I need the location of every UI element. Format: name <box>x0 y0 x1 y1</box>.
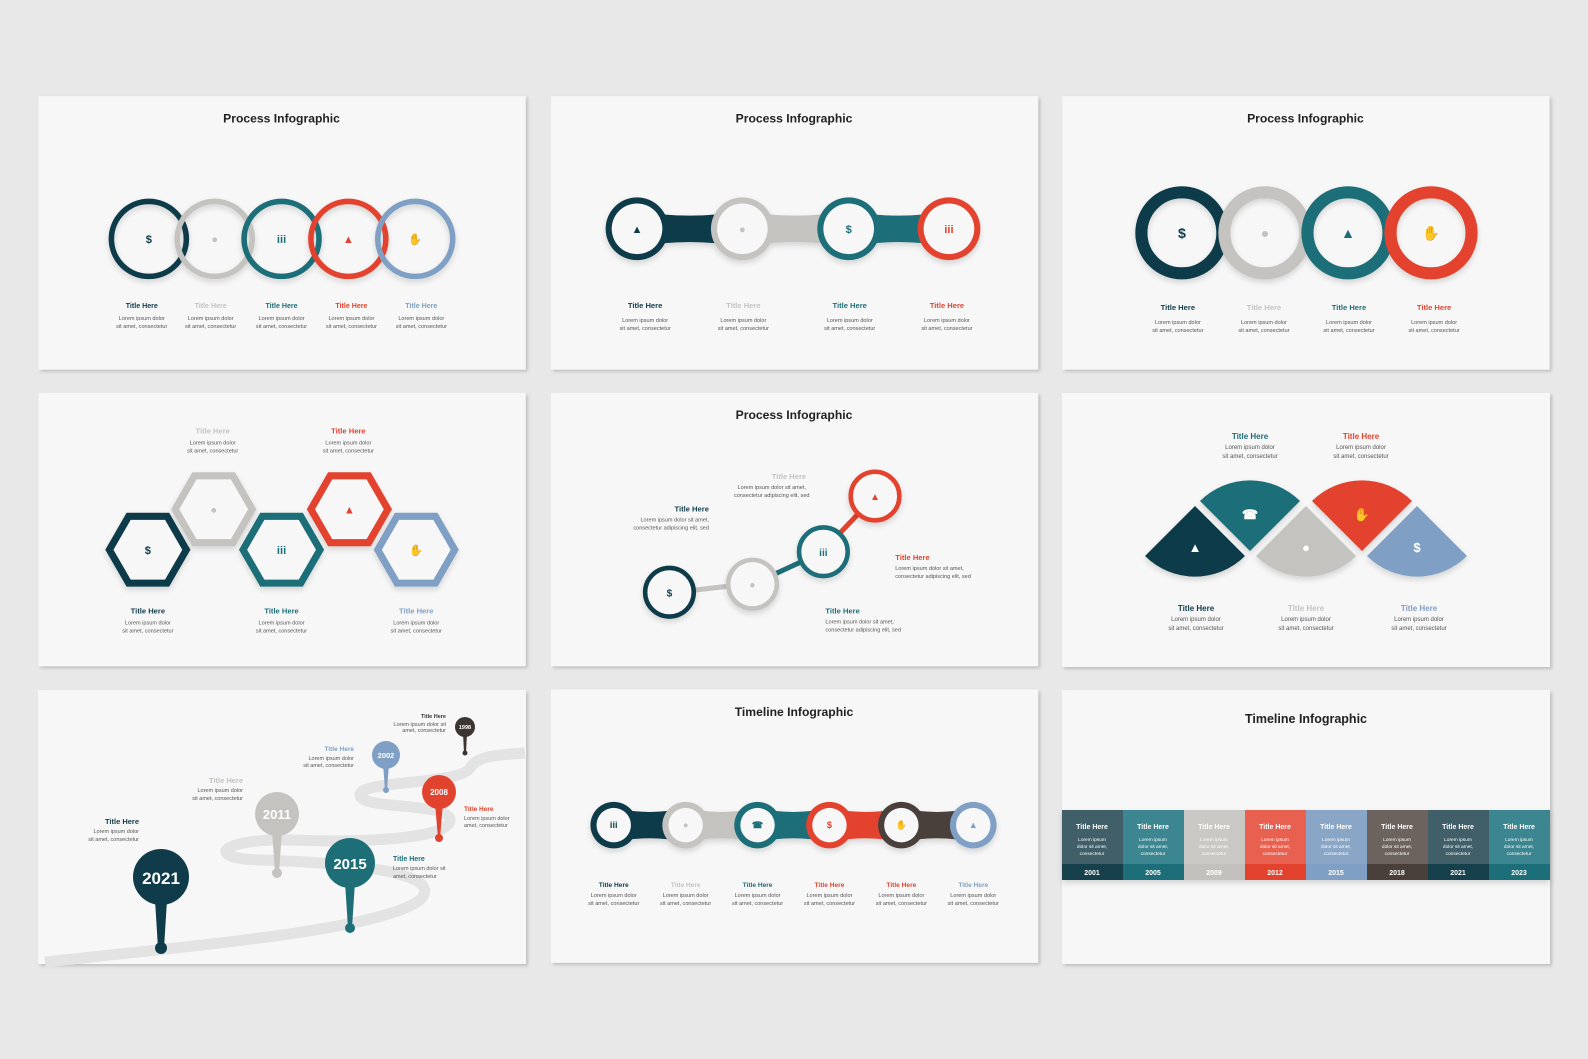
labels: consectetur adipiscing elit, sed <box>633 525 709 531</box>
labels: Title Here <box>726 301 761 310</box>
icons: $ <box>827 820 832 830</box>
labels: sit amet, consectetur <box>588 901 639 907</box>
icons: ▲ <box>344 504 355 516</box>
labels: Lorem ipsum dolor <box>663 893 709 899</box>
labels: Lorem ipsum dolor <box>1155 320 1201 326</box>
icons: iii <box>277 234 286 246</box>
labels: Title Here <box>1161 303 1195 312</box>
labels: Lorem ipsum dolor <box>1171 617 1221 623</box>
labels: Title Here <box>895 553 930 562</box>
icons: ● <box>749 580 756 591</box>
icons: ☎ <box>1242 507 1258 522</box>
labels: Lorem ipsum dolor <box>190 440 236 446</box>
labels: sit amet, consectetur <box>1222 454 1278 460</box>
labels: Lorem ipsum dolor sit <box>393 866 446 872</box>
icons: $ <box>1178 226 1186 242</box>
labels: sit amet, consectetur <box>1278 626 1334 632</box>
labels: sit amet, consectetur <box>396 324 447 330</box>
band text: Lorem ipsum <box>1139 837 1167 843</box>
band text: dolor sit amet, <box>1077 844 1107 850</box>
panel 9: color band timeline <box>1062 690 1550 964</box>
band text: consectetur <box>1507 851 1532 857</box>
labels: Title Here <box>832 301 867 310</box>
chain <box>606 197 980 260</box>
icons: ● <box>739 224 746 236</box>
pins: 1998 <box>459 725 471 731</box>
labels <box>88 714 510 880</box>
icons: ☎ <box>752 820 763 830</box>
labels: sit amet, consectetur <box>303 763 354 769</box>
bands <box>1062 810 1550 880</box>
icons: $ <box>145 545 152 557</box>
labels: Lorem ipsum dolor <box>398 316 444 322</box>
road <box>45 753 525 962</box>
pins: 2008 <box>430 788 448 797</box>
band text: dolor sit amet, <box>1260 844 1290 850</box>
labels: sit amet, consectetur <box>1238 328 1290 334</box>
labels: Title Here <box>1343 432 1380 441</box>
labels: sit amet, consectetur <box>660 901 711 907</box>
labels: Lorem ipsum dolor <box>125 621 171 627</box>
labels: Lorem ipsum dolor <box>197 788 243 794</box>
hexagons <box>109 476 455 583</box>
band text: consectetur <box>1080 851 1105 857</box>
icons: ▲ <box>870 492 880 503</box>
band text: dolor sit amet, <box>1504 844 1534 850</box>
labels: Title Here <box>1288 604 1325 613</box>
band text: consectetur <box>1141 851 1166 857</box>
band text: dolor sit amet, <box>1199 844 1229 850</box>
band text: dolor sit amet, <box>1443 844 1473 850</box>
labels: consectetur adipiscing elit, sed <box>895 574 971 580</box>
title: Process Infographic <box>1247 112 1364 125</box>
title: Process Infographic <box>736 408 853 422</box>
labels: sit amet, consectetur <box>116 324 168 330</box>
icons: ✋ <box>408 232 422 246</box>
panel 7: road timeline pins <box>38 690 526 964</box>
panel 1: linked rings <box>38 96 526 370</box>
labels: Title Here <box>599 882 629 889</box>
labels: amet, consectetur <box>393 874 437 880</box>
sectors <box>1145 480 1467 577</box>
rings <box>111 201 453 276</box>
labels: sit amet, consectetur <box>921 326 973 332</box>
labels: sit amet, consectetur <box>192 796 243 802</box>
labels: Title Here <box>126 302 158 310</box>
icons: ● <box>211 234 218 246</box>
band text: Lorem ipsum <box>1444 837 1472 843</box>
band text: Title Here <box>1503 824 1535 831</box>
icons <box>667 492 880 599</box>
labels: Title Here <box>886 882 917 889</box>
band text: Lorem ipsum <box>1200 837 1228 843</box>
labels: sit amet, consectetur <box>323 449 374 455</box>
labels: Title Here <box>628 301 662 310</box>
labels: Lorem ipsum dolor sit amet, <box>825 620 894 626</box>
icons: ● <box>1261 226 1269 242</box>
labels: sit amet, consectetur <box>804 901 855 907</box>
labels: Lorem ipsum dolor <box>1281 617 1331 623</box>
band text: 2001 <box>1084 870 1100 877</box>
icons: ✋ <box>1422 225 1440 242</box>
icons: ✋ <box>896 819 907 830</box>
labels: Lorem ipsum dolor <box>1394 617 1444 623</box>
band text: Title Here <box>1259 824 1291 831</box>
labels: Lorem ipsum dolor <box>259 316 305 322</box>
labels: Title Here <box>930 301 964 310</box>
labels: Title Here <box>399 607 433 616</box>
labels: sit amet, consectetur <box>732 901 783 907</box>
band text: consectetur <box>1202 851 1227 857</box>
panel 3: thick rings <box>1062 96 1550 370</box>
band text <box>1076 824 1535 877</box>
title: Timeline Infographic <box>735 705 854 719</box>
labels: Title Here <box>1417 303 1451 312</box>
labels: Title Here <box>743 882 773 889</box>
icons: $ <box>846 224 853 236</box>
band text: 2021 <box>1450 870 1466 877</box>
labels: Title Here <box>405 302 437 310</box>
labels: Title Here <box>335 302 368 310</box>
band text: Title Here <box>1137 824 1169 831</box>
icons <box>632 224 954 236</box>
labels: Title Here <box>209 776 243 785</box>
band text: Title Here <box>1198 824 1230 831</box>
icons: ▲ <box>1189 540 1201 555</box>
band text: 2018 <box>1389 870 1405 877</box>
icons: ✋ <box>409 543 423 557</box>
icons: ✋ <box>1354 507 1370 522</box>
labels: Lorem ipsum dolor <box>1225 445 1275 451</box>
labels: Lorem ipsum dolor <box>325 440 372 446</box>
labels: sit amet, consectetur <box>876 901 927 907</box>
labels: consectetur adipiscing elit, sed <box>825 628 901 634</box>
labels: consectetur adipiscing elit, sed <box>734 493 810 499</box>
labels <box>1152 303 1460 334</box>
title: Process Infographic <box>736 112 853 125</box>
labels: sit amet, consectetur <box>256 324 307 330</box>
icons: ▲ <box>1341 226 1355 242</box>
icons: ▲ <box>343 234 354 246</box>
labels: Lorem ipsum dolor <box>827 318 873 324</box>
band text: Lorem ipsum <box>1505 837 1533 843</box>
labels: Lorem ipsum dolor <box>328 316 375 322</box>
band text: Lorem ipsum <box>1383 837 1411 843</box>
labels: Lorem ipsum dolor <box>924 318 970 324</box>
labels: Title Here <box>464 806 494 813</box>
icons: $ <box>146 234 153 246</box>
labels: sit amet, consectetur <box>1391 626 1447 632</box>
labels: Lorem ipsum dolor sit amet, <box>737 485 806 491</box>
labels: sit amet, consectetur <box>326 324 377 330</box>
labels <box>122 426 442 635</box>
band text: Lorem ipsum <box>1322 837 1350 843</box>
labels: sit amet, consectetur <box>185 324 236 330</box>
labels: Lorem ipsum dolor <box>1336 445 1386 451</box>
icons: ● <box>683 820 688 830</box>
pins <box>133 717 475 954</box>
labels: Title Here <box>421 714 446 720</box>
labels: Title Here <box>675 504 709 513</box>
panel 2: connected pill chain <box>551 96 1038 370</box>
labels: Lorem ipsum dolor <box>1411 320 1457 326</box>
panel 6: wave sectors <box>1062 393 1550 667</box>
icons: ● <box>210 504 217 516</box>
icons: iii <box>610 820 618 830</box>
labels: amet, consectetur <box>402 728 446 734</box>
labels: Title Here <box>105 817 139 826</box>
band text: consectetur <box>1263 851 1288 857</box>
labels: Lorem ipsum dolor <box>93 829 139 835</box>
panel 5: ascending steps <box>551 393 1038 666</box>
band text: Title Here <box>1442 824 1474 831</box>
icons: ▲ <box>632 224 643 236</box>
labels: Title Here <box>195 426 230 435</box>
labels: Lorem ipsum dolor <box>878 893 924 899</box>
labels: amet, consectetur <box>464 823 508 829</box>
band text: Title Here <box>1076 824 1108 831</box>
labels: sit amet, consectetur <box>948 901 999 907</box>
icons <box>1189 507 1421 555</box>
band text: Lorem ipsum <box>1261 837 1289 843</box>
labels: Title Here <box>1401 604 1438 613</box>
labels: Title Here <box>1332 303 1366 312</box>
band text: consectetur <box>1324 851 1349 857</box>
title: Process Infographic <box>223 112 340 125</box>
icons <box>146 232 422 246</box>
band text: dolor sit amet, <box>1138 844 1168 850</box>
icons: $ <box>667 588 673 599</box>
band text: Title Here <box>1381 824 1413 831</box>
labels: Title Here <box>671 882 701 889</box>
band text: consectetur <box>1385 851 1410 857</box>
labels: sit amet, consectetur <box>1152 328 1204 334</box>
band text: consectetur <box>1446 851 1471 857</box>
labels: Lorem ipsum dolor <box>950 893 996 899</box>
labels: Lorem ipsum dolor sit amet, <box>640 517 709 523</box>
labels: Title Here <box>331 426 366 435</box>
labels: Lorem ipsum dolor <box>393 621 439 627</box>
labels: Title Here <box>1232 432 1269 441</box>
labels: Lorem ipsum dolor <box>735 893 781 899</box>
labels: Title Here <box>265 302 298 310</box>
labels: Lorem ipsum dolor <box>806 893 853 899</box>
labels <box>633 472 971 634</box>
labels: Title Here <box>264 607 299 616</box>
labels: sit amet, consectetur <box>718 326 769 332</box>
band text: 2023 <box>1511 870 1527 877</box>
labels: Title Here <box>815 882 845 889</box>
labels <box>1168 432 1447 632</box>
labels: Lorem ipsum dolor <box>259 621 305 627</box>
labels: Title Here <box>1247 303 1281 312</box>
labels: Title Here <box>324 746 354 753</box>
labels <box>116 302 447 330</box>
icons <box>1178 225 1440 242</box>
labels: Lorem ipsum dolor sit amet, <box>895 566 964 572</box>
rings <box>1141 192 1472 273</box>
labels: Title Here <box>1178 604 1215 613</box>
labels: sit amet, consectetur <box>391 629 442 635</box>
labels: Title Here <box>131 607 165 616</box>
icons: $ <box>1413 540 1421 555</box>
labels: Lorem ipsum dolor sit <box>393 722 446 728</box>
title: Timeline Infographic <box>1245 712 1367 726</box>
labels: Lorem ipsum dolor <box>464 816 510 822</box>
connectors <box>694 514 858 590</box>
icons <box>145 504 423 557</box>
labels: Lorem ipsum dolor <box>622 318 668 324</box>
icons: iii <box>944 224 954 236</box>
pins: 2015 <box>333 856 367 873</box>
labels <box>620 301 973 332</box>
labels: Lorem ipsum dolor <box>1326 320 1372 326</box>
labels: sit amet, consectetur <box>1408 328 1460 334</box>
band text: dolor sit amet, <box>1321 844 1351 850</box>
labels: Lorem ipsum dolor <box>308 756 354 762</box>
labels: Lorem ipsum dolor <box>720 318 766 324</box>
labels: Lorem ipsum dolor <box>1241 320 1287 326</box>
pins: 2011 <box>263 807 291 822</box>
icons <box>610 819 978 830</box>
labels: Title Here <box>195 302 227 310</box>
band text: 2015 <box>1328 870 1344 877</box>
band text: 2009 <box>1206 870 1222 877</box>
labels: sit amet, consectetur <box>256 629 307 635</box>
icons: ▲ <box>969 820 978 830</box>
labels: Title Here <box>772 472 806 481</box>
pins: 2002 <box>378 751 394 760</box>
panel 4: hexagons <box>38 393 526 666</box>
labels: sit amet, consectetur <box>824 326 875 332</box>
pins: 2021 <box>142 869 180 888</box>
icons: ● <box>1302 540 1310 555</box>
labels: sit amet, consectetur <box>620 326 671 332</box>
step circles <box>645 472 899 617</box>
band text: Lorem ipsum <box>1078 837 1106 843</box>
labels: Title Here <box>958 882 989 889</box>
labels: Lorem ipsum dolor <box>119 316 165 322</box>
labels: sit amet, consectetur <box>122 629 174 635</box>
band text: 2005 <box>1145 870 1161 877</box>
labels: Lorem ipsum dolor <box>188 316 234 322</box>
labels: Lorem ipsum dolor <box>591 893 637 899</box>
icons: iii <box>277 545 286 557</box>
icons: iii <box>819 548 828 559</box>
panel 8: timeline chain <box>551 689 1038 963</box>
labels: sit amet, consectetur <box>88 837 139 843</box>
band text: dolor sit amet, <box>1382 844 1412 850</box>
labels: sit amet, consectetur <box>187 449 238 455</box>
band text: Title Here <box>1320 824 1352 831</box>
labels: sit amet, consectetur <box>1333 454 1389 460</box>
band text: 2012 <box>1267 870 1283 877</box>
chain <box>590 802 997 848</box>
labels: Title Here <box>393 856 425 863</box>
labels: sit amet, consectetur <box>1323 328 1375 334</box>
labels <box>588 882 999 907</box>
labels: sit amet, consectetur <box>1168 626 1224 632</box>
labels: Title Here <box>825 607 860 616</box>
